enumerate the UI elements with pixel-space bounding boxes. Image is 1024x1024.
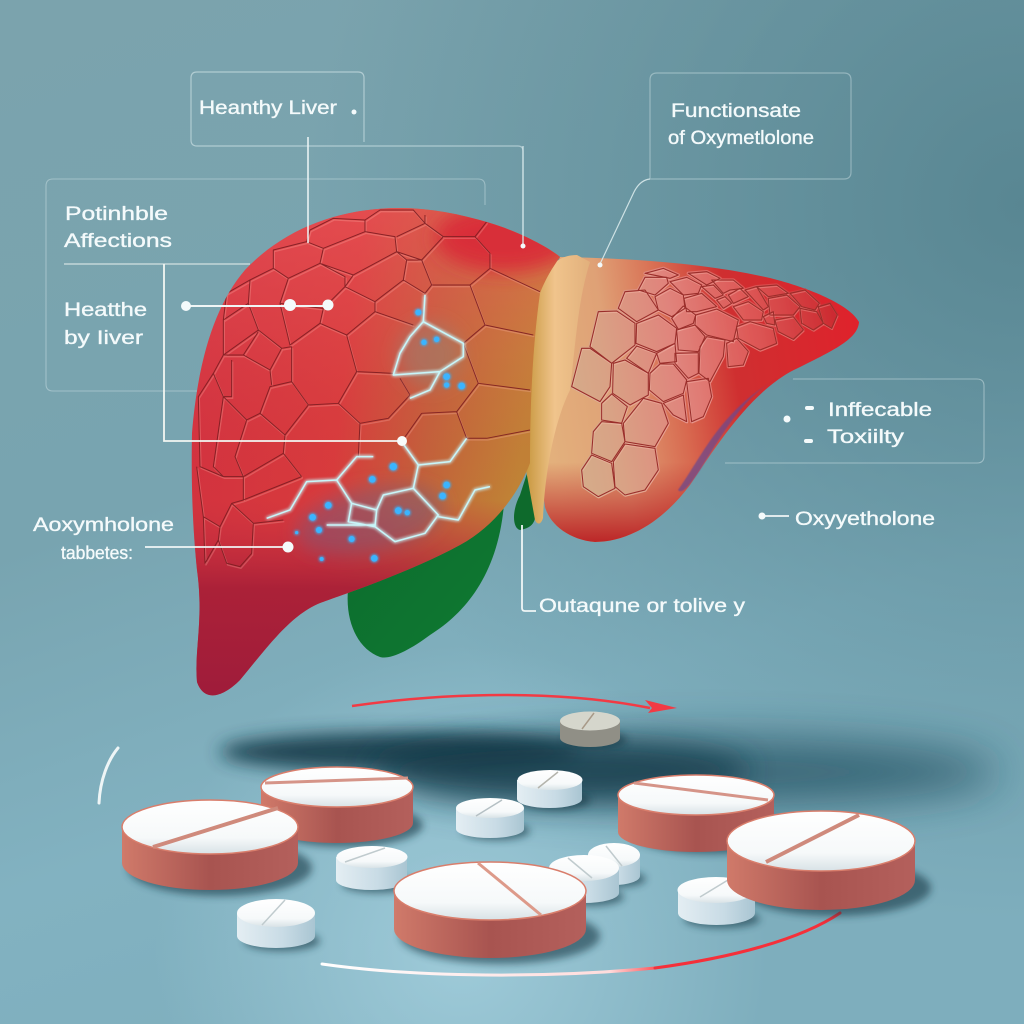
callout line to tablets label (145, 542, 294, 552)
left lobe cells (572, 268, 838, 498)
label: oxymetholone tablets: tabbetes: (61, 543, 133, 563)
tan connecting band (526, 255, 590, 524)
label: function state of oxymetholone (668, 101, 814, 149)
liver (192, 204, 859, 695)
label: toxicity (827, 400, 932, 448)
label: toxicity: Inffecable (828, 400, 932, 421)
callout line to oxymetholone (758, 512, 789, 520)
large tablet 2 (261, 767, 413, 843)
red and white arc: bottom (322, 913, 840, 975)
small grey tablet (560, 712, 620, 747)
shadow under liver (220, 732, 1000, 806)
white arc: left (99, 748, 118, 803)
callout lines: possible affections (64, 264, 407, 446)
blue infection dots (295, 309, 465, 562)
small tablet 2 (456, 798, 524, 838)
label: oxymetholone: Oxyyetholone (795, 509, 935, 530)
gallbladder (348, 480, 505, 658)
annotation box: toxicity (725, 379, 984, 463)
label: oxymetholone tablets: Aoxymholone (33, 515, 174, 536)
label: possible affections (64, 204, 172, 252)
left lobe lower shade (539, 257, 859, 542)
small tablet 3 (336, 846, 408, 890)
label: possible affections: Affections (64, 231, 172, 252)
callout line to lower label (522, 525, 536, 611)
label: oxymetholone tablets (33, 515, 174, 563)
tablets (122, 712, 931, 964)
right lobe (192, 208, 560, 695)
annotation box: healthy liver (191, 72, 526, 248)
small tablet 6 (678, 877, 755, 925)
small tablet 7 (549, 855, 619, 903)
left lobe (539, 257, 859, 542)
green bile duct (514, 455, 536, 530)
label: possible affections: Potinhble (65, 204, 168, 225)
label: lower toxicity: Outaqune or tolive y (539, 596, 746, 617)
large tablet 1 (122, 800, 298, 890)
annotation box: function state (598, 73, 851, 268)
small tablet 1 (517, 770, 582, 808)
small tablet 5 (237, 899, 315, 948)
label: healthy by liver (64, 300, 147, 349)
label: toxicity: Toxiilty (827, 427, 905, 448)
infected glow region (290, 323, 462, 567)
label: healthy by liver: by Iiver (64, 328, 144, 349)
glowing affected cell lines (267, 295, 490, 542)
red upper right corner of right lobe (435, 204, 575, 272)
label: healthy liver: Heanthy Liver (199, 98, 338, 119)
large tablet 5 (727, 811, 915, 910)
red arrow: top (352, 695, 677, 713)
purple rim on left lobe (678, 378, 778, 491)
large tablet 3 (394, 862, 586, 958)
toxicity bullets (784, 406, 814, 443)
pill shadows (128, 731, 931, 964)
label: function state of oxymetholone: of Oxymetlolone (668, 128, 814, 149)
large tablet 4 (618, 775, 774, 852)
small tablet 8 (588, 843, 640, 885)
right lobe shading (192, 208, 560, 695)
label: function state of oxymetholone: Functionsate (671, 101, 801, 122)
label: healthy by liver: Heatthe (64, 300, 147, 321)
annotation box: possible affections (46, 179, 485, 391)
callout with three dots (181, 299, 334, 311)
right lobe cell network (197, 210, 541, 568)
